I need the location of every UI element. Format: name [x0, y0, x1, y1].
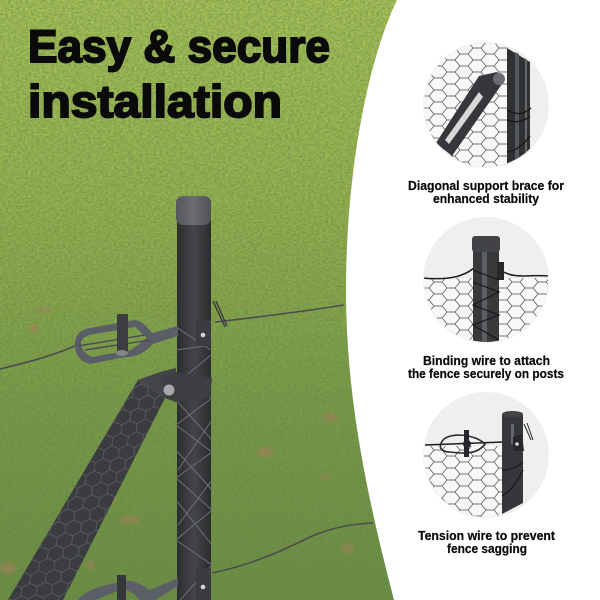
title [28, 21, 330, 127]
grass background photo [0, 0, 420, 600]
title: Easy & secure [28, 21, 330, 72]
lower tensioner [78, 575, 178, 600]
main post with cap [176, 196, 211, 600]
upper tensioner [75, 314, 178, 364]
caption 1: Diagonal support brace for [408, 179, 564, 193]
top bracket [196, 301, 227, 346]
caption 3 [418, 529, 556, 556]
detail 2: binding wire [423, 217, 549, 347]
brace bolt [160, 372, 212, 402]
lower bracket [196, 568, 211, 600]
caption 2: Binding wire to attach [423, 354, 550, 368]
mesh wound on post [176, 327, 212, 600]
caption 1: enhanced stability [433, 192, 539, 206]
detail 1: diagonal brace [423, 42, 549, 170]
caption 2 [408, 354, 564, 381]
top wire left [0, 345, 77, 369]
caption 3: Tension wire to prevent [418, 529, 556, 543]
top wire right [215, 305, 344, 322]
lower wire right [212, 523, 373, 573]
diagonal brace [8, 368, 176, 600]
white side panel [346, 0, 600, 600]
detail 3: tension wire [423, 392, 549, 521]
caption 2: the fence securely on posts [408, 367, 564, 381]
caption 1 [408, 179, 564, 206]
caption 3: fence sagging [447, 542, 527, 556]
title: installation [28, 76, 282, 127]
